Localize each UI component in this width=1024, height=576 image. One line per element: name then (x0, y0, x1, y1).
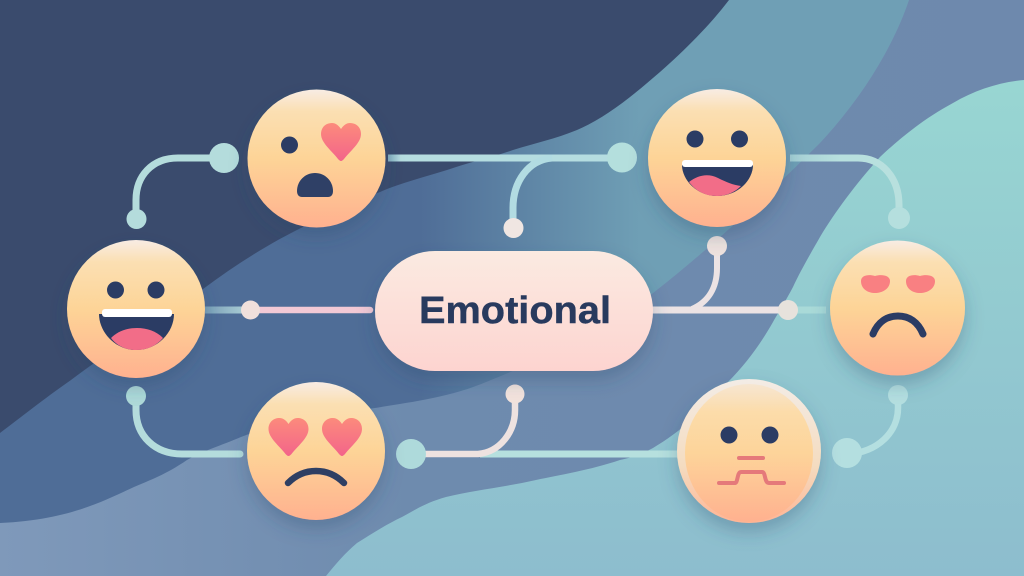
background: light teal wave (326, 80, 1024, 576)
central pill: Emotional (375, 251, 653, 371)
face: sad with pink eyes, right (830, 240, 965, 376)
face: surprised with one heart eye (248, 90, 386, 228)
connector: right face to bottom-right face (832, 385, 908, 468)
face: laughing left (67, 240, 205, 378)
connector: left face to pill (205, 300, 370, 320)
connector: bottom-left face to bottom-right face (396, 384, 682, 469)
label: Emotional: Emotional (419, 290, 611, 332)
face: laughing top right (648, 89, 786, 227)
connector: top-left face to top-right face (388, 142, 637, 238)
face: wavering mouth, bottom right (677, 379, 821, 523)
connector: pill to right face (652, 236, 826, 320)
face: sad with heart eyes, bottom left (247, 382, 385, 520)
connector: left face to bottom-left face (126, 386, 240, 454)
connector: top-right face to right face (790, 158, 910, 229)
connector: left face to top-left face (126, 143, 239, 229)
background: navy wave (0, 0, 729, 433)
